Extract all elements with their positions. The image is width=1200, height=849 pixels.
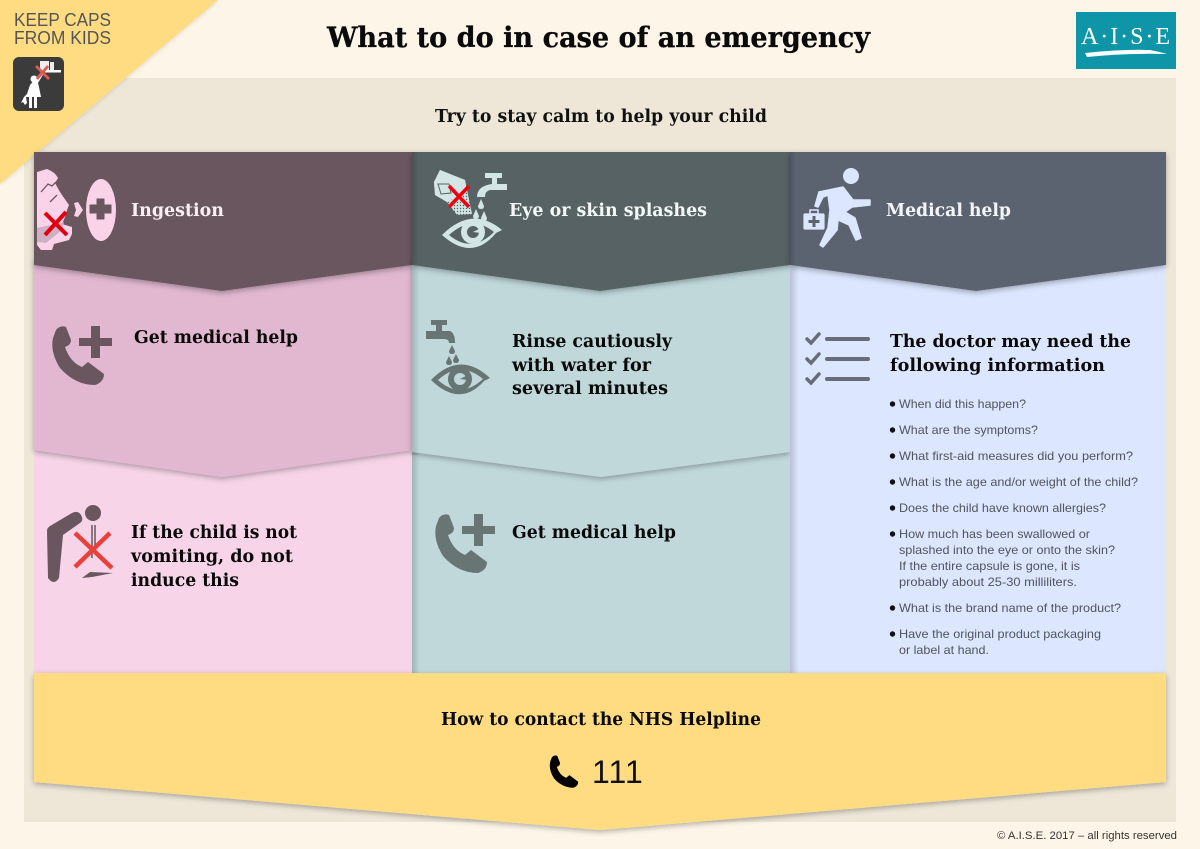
list: questions for the doctor: If the entire capsule is gone, it is: [899, 559, 1080, 573]
icon: checklist: [807, 334, 868, 383]
heading: doctor information: [890, 331, 1131, 376]
corner banner: keep caps from kids: KEEP CAPS: [14, 10, 111, 30]
icon: do not induce vomiting: [47, 505, 113, 582]
list: questions for the doctor: What are the symptoms?: [899, 423, 1038, 437]
text: get medical help: Get medical help: [134, 328, 298, 348]
list: questions for the doctor: What is the age and/or weight of the child?: [899, 475, 1138, 489]
list: questions for the doctor: probably about 25-30 milliliters.: [899, 575, 1077, 589]
panel: medical help column: [790, 152, 1166, 673]
eye header: [412, 152, 790, 291]
text: do not induce vomiting: vomiting, do not: [130, 547, 293, 567]
phone number: 111: [592, 754, 643, 790]
heading: ingestion: Ingestion: [131, 201, 224, 221]
list: questions for the doctor: splashed into the eye or onto the skin?: [899, 543, 1115, 557]
list: questions for the doctor: What is the brand name of the product?: [899, 601, 1121, 615]
text: rinse cautiously: several minutes: [512, 379, 668, 399]
list: questions for the doctor: [890, 397, 1138, 657]
text: rinse cautiously: Rinse cautiously: [512, 332, 673, 352]
list: questions for the doctor: or label at hand.: [899, 643, 989, 657]
icon: phone with plus: [435, 514, 495, 573]
medical help header: [790, 152, 1166, 291]
text: rinse cautiously: with water for: [511, 356, 652, 376]
text: do not induce vomiting: If the child is not: [131, 523, 297, 543]
heading: doctor information: following information: [890, 355, 1105, 376]
icon: mouth with cross: [37, 169, 116, 250]
heading: eye or skin splashes: Eye or skin splashes: [509, 201, 707, 221]
list: questions for the doctor: What first-aid measures did you perform?: [899, 449, 1133, 463]
panel: eye or skin splashes column: [412, 152, 790, 673]
text: rinse cautiously: [511, 332, 673, 399]
copyright: © A.I.S.E. 2017 – all rights reserved: [997, 830, 1177, 842]
text: do not induce vomiting: [130, 523, 297, 591]
icon: telephone: [550, 756, 578, 788]
panel: NHS helpline: [34, 673, 1166, 830]
icon: running person with medical case: [803, 168, 870, 247]
logo: A.I.S.E.: A·I·S·E: [1081, 24, 1170, 50]
text: do not induce vomiting: induce this: [131, 571, 239, 591]
list: questions for the doctor: Does the child have known allergies?: [899, 501, 1106, 515]
icon: capsule, tap and eye with cross: [434, 170, 507, 248]
title: What to do in case of an emergency: [326, 21, 871, 54]
list: questions for the doctor: How much has been swallowed or: [899, 527, 1090, 541]
text: get medical help: Get medical help: [512, 523, 676, 543]
list: questions for the doctor: Have the original product packaging: [899, 627, 1101, 641]
corner banner: keep caps from kids: [0, 0, 218, 184]
icon: tap and eye: [426, 320, 490, 394]
subtitle: Try to stay calm to help your child: [435, 107, 767, 127]
corner banner: keep caps from kids: FROM KIDS: [14, 28, 111, 48]
panel: ingestion column: [34, 152, 412, 673]
heading: doctor information: The doctor may need the: [890, 331, 1131, 352]
ingestion header: [34, 152, 412, 291]
logo: A.I.S.E.: [1076, 12, 1176, 69]
eye action panel: [412, 260, 790, 477]
ingestion action panel: [34, 260, 412, 477]
heading: medical help: Medical help: [886, 201, 1011, 221]
heading: NHS helpline: How to contact the NHS Helpline: [441, 710, 761, 730]
list: questions for the doctor: When did this happen?: [899, 397, 1026, 411]
icon: phone with plus: [52, 326, 112, 385]
